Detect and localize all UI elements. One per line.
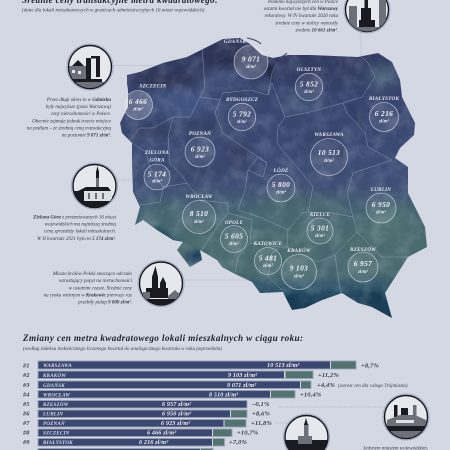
bubble: Szczecin: [124, 84, 167, 120]
bubble: Gdańsk: zł/m²: [245, 64, 257, 70]
bubble: Lublin: LUBLIN: [370, 187, 391, 193]
row 4: +10,4%: [300, 392, 322, 398]
bubble: Wrocław: 8 510: [190, 209, 208, 218]
bubble: Lublin: 6 950: [372, 200, 390, 209]
bubble: Olsztyn: OLSZTYN: [297, 67, 321, 73]
bubble: Zielona Góra: 5 174: [148, 170, 166, 178]
row 7: 6 923 zł/m²: [161, 420, 190, 427]
text: Zielona Góra note: [32, 216, 117, 242]
bubble: Wrocław: WROCŁAW: [185, 194, 213, 200]
row 9: [22, 438, 247, 446]
bubble: Kielce: zł/m²: [314, 233, 326, 239]
row 6: #6: [22, 410, 30, 418]
bubble: Białystok: 6 216: [375, 109, 393, 118]
section heading: Zmiany cen metra kwadratowego lokali mieszkalnych w ciągu roku:: [22, 333, 303, 343]
row 4: WROCŁAW: [43, 392, 70, 398]
icon: Warsaw palace of culture: [344, 0, 390, 35]
bubble: Warszawa: WARSZAWA: [314, 132, 344, 138]
row 9: 6 216 zł/m²: [139, 439, 168, 446]
bubble: Katowice: KATOWICE: [253, 241, 283, 247]
bubble: Kielce: 5 301: [311, 224, 329, 232]
subtitle: (dane dla lokali mieszkaniowych w granicach administracyjnych 16 miast wojewódzkich): [22, 6, 205, 14]
row 2: KRAKÓW: [42, 371, 66, 379]
row 5: [22, 400, 270, 408]
row 4: #4: [22, 392, 29, 398]
row 4: [22, 390, 322, 398]
bubble: Szczecin: SZCZECIN: [140, 84, 167, 90]
text: Warsaw note: [264, 0, 339, 34]
bubble: Poznań: zł/m²: [194, 154, 206, 160]
voivodeship borders: [130, 48, 408, 303]
section subheading: (według indeksu hedonicznego liczonego kwartał do analogicznego kwartału w roku poprzednim): [23, 345, 222, 352]
row 5: 6 957 zł/m²: [162, 401, 191, 408]
bubble: Bydgoszcz: BYDGOSZCZ: [225, 97, 259, 103]
row 2: +11,2%: [318, 372, 339, 379]
row 2: 9 103 zł/m²: [228, 372, 257, 379]
bubble: Warszawa: [310, 132, 348, 176]
icon: Rzeszów castle: [383, 394, 429, 440]
row 7: #7: [22, 420, 30, 427]
bubble: Olsztyn: zł/m²: [303, 89, 315, 95]
text: Zielona Góra note: wojewódzkich ma najniższą średnią: [45, 222, 116, 228]
row 1: +8,7%: [361, 362, 379, 370]
text: Kraków note: przebiły pułap 9 000 zł/m².: [77, 300, 132, 306]
row 3: GDAŃSK: [43, 381, 65, 389]
leader lines: [113, 33, 385, 423]
row 8: SZCZECIN: [43, 430, 70, 436]
row 8: [22, 429, 259, 436]
bubble: Zielona Góra: ZIELONA: [144, 150, 169, 156]
row 3: +4,4%: [317, 382, 335, 389]
row 7: +11,8%: [251, 420, 272, 427]
bubble: Kielce: [307, 212, 333, 244]
text: Warsaw note: średnio 10 661 zł/m².: [296, 28, 338, 34]
bubble: Kraków: zł/m²: [293, 274, 305, 280]
row 3: 9 071 zł/m²: [227, 382, 256, 389]
text: Kraków note: [44, 272, 133, 306]
bubble: Zielona Góra: [144, 150, 170, 190]
text: Gdańsk note: były najwyższe (poza Warszawą): [46, 105, 111, 110]
bubble: Kraków: 9 103: [290, 264, 308, 272]
text: Gdańsk note: na podium – ze średnią ceną transakcyjną: [27, 126, 111, 132]
bubble: Białystok: zł/m²: [378, 118, 390, 124]
bubble: Bydgoszcz: zł/m²: [236, 119, 248, 125]
row 10: [38, 448, 213, 450]
row 5: #5: [22, 401, 30, 408]
row 3: #3: [22, 382, 30, 389]
bubble: Gdańsk: 9 071: [242, 54, 260, 64]
bubble: Olsztyn: [295, 67, 323, 101]
row 1: WARSZAWA: [43, 363, 72, 369]
bubble: Lublin: zł/m²: [375, 210, 387, 216]
bubble: Łódź: 5 800: [272, 180, 290, 189]
text: Zielona Góra note: cenę sprzedaży lokali mieszkalnych.: [44, 230, 116, 234]
bubble: Warszawa: zł/m²: [323, 158, 335, 164]
icon: Gdańsk crane: [67, 44, 113, 91]
row 1: #1: [22, 362, 29, 370]
bubble: Opole: OPOLE: [225, 220, 243, 226]
icon: Zielona Góra tower: [70, 163, 118, 210]
icon: Poznań town hall: [284, 414, 330, 450]
bubble: Bydgoszcz: [225, 97, 259, 131]
row 1: 10 513 zł/m²: [267, 362, 299, 369]
text: Gdańsk note: na poziomie 9 071 zł/m².: [62, 132, 111, 138]
bubble: Szczecin: 6 466: [129, 97, 147, 106]
text: Warsaw note: rekordowy. W IV kwartale 2020 roku: [264, 14, 338, 19]
row 1: [22, 361, 379, 370]
bubble: Kraków: [282, 246, 316, 290]
bubble: Poznań: 6 923: [191, 144, 209, 154]
bubble: Zielona Góra: zł/m²: [151, 178, 163, 184]
bubble: Katowice: 5 481: [259, 254, 277, 262]
bubble: Zielona Góra: GÓRA: [149, 156, 165, 164]
row 6: [22, 410, 270, 418]
text: Warsaw note: Pomimo najwyższych cen w Polsce: [267, 0, 339, 5]
text: Kraków note: w ostatnim czasie. Średnie ceny: [69, 284, 133, 292]
row 7: [22, 419, 272, 427]
row 6: +8,6%: [252, 410, 270, 418]
bubble: Opole: 5 605: [225, 232, 243, 240]
text: Gdańsk note: Przez długi okres to w Gdańsku: [46, 98, 111, 103]
text: Gdańsk note: Obecnie zajmuje jednak trzecie miejsce: [32, 120, 112, 124]
bubble: Katowice: [253, 241, 283, 274]
bubble: Gdańsk: [224, 37, 268, 79]
map of Poland: [115, 35, 430, 320]
bubble: Poznań: [185, 129, 215, 167]
bubble: Rzeszów: 6 957: [354, 259, 372, 268]
text: Gdańsk note: ceny nieruchomości w Polsce.: [51, 112, 111, 117]
row 3: [22, 381, 408, 389]
text: Kraków note: Miasto królów Polski znacząco odczuło: [52, 272, 132, 277]
row 7: POZNAŃ: [43, 419, 65, 427]
row 4: 8 510 zł/m²: [209, 392, 238, 398]
row 8: 6 466 zł/m²: [147, 430, 176, 436]
row 9: #9: [22, 439, 30, 446]
row 6: 6 950 zł/m²: [162, 410, 191, 418]
text: Warsaw note: ostatni kwartał nie był dla Warszawy: [264, 7, 339, 12]
row 2: [22, 371, 339, 379]
text: Zielona Góra note: Zielona Góra z prezentowanych 16 miast: [32, 216, 117, 220]
bubble: Bydgoszcz: 5 792: [233, 110, 251, 118]
bubble: Łódź: zł/m²: [275, 190, 287, 196]
text: Zielona Góra note: W II kwartale 2021 było to 5 174 zł/m².: [37, 236, 116, 242]
bubble: Białystok: [368, 96, 399, 132]
bubble: Kielce: KIELCE: [309, 212, 330, 218]
bubble: Białystok: BIAŁYSTOK: [368, 96, 399, 102]
bubble: Łódź: [267, 166, 295, 202]
bubble: Szczecin: zł/m²: [132, 106, 144, 112]
bubble: Łódź: ŁÓDŹ: [273, 166, 289, 174]
text: Gdańsk note: [27, 98, 112, 138]
row 2: #2: [22, 372, 30, 379]
text: Kraków note: wzrastający popyt na nieruchomości: [59, 279, 133, 284]
bubble: Rzeszów: RZESZÓW: [350, 245, 376, 253]
row 6: LUBLIN: [42, 412, 63, 418]
icon: Kraków St Mary's basilica: [138, 260, 184, 308]
text: Kraków note: na rynku wtórnym w Krakowie pierwszy raz: [44, 294, 132, 298]
text: Warsaw note: średnie ceny w stolicy wynosiły: [275, 22, 339, 26]
bubble: Lublin: [366, 187, 396, 223]
bubble: Warszawa: 10 513: [318, 148, 340, 157]
bubble: Kraków: KRAKÓW: [286, 246, 311, 254]
bubble: Katowice: zł/m²: [262, 263, 274, 269]
bar chart: [22, 361, 408, 450]
bubble: Wrocław: [182, 194, 216, 234]
bubble: Poznań: POZNAŃ: [189, 129, 211, 137]
bubble: Rzeszów: [348, 245, 378, 282]
bubble: Opole: zł/m²: [228, 241, 240, 247]
bubble: Rzeszów: zł/m²: [357, 269, 369, 275]
bubble: Opole: [220, 220, 248, 252]
row 5: RZESZÓW: [43, 400, 69, 408]
row 3: (wzrost cen dla całego Trójmiasta): [338, 384, 408, 389]
bubble: Wrocław: zł/m²: [193, 219, 205, 225]
row 5: –0,1%: [251, 401, 270, 408]
bubble: Gdańsk: GDAŃSK: [224, 37, 246, 45]
row 9: +7,0%: [229, 439, 247, 446]
row 8: +10,7%: [237, 430, 259, 436]
row 8: #8: [22, 430, 30, 436]
bubble: Olsztyn: 5 852: [300, 80, 318, 88]
row 9: BIAŁYSTOK: [42, 440, 73, 446]
